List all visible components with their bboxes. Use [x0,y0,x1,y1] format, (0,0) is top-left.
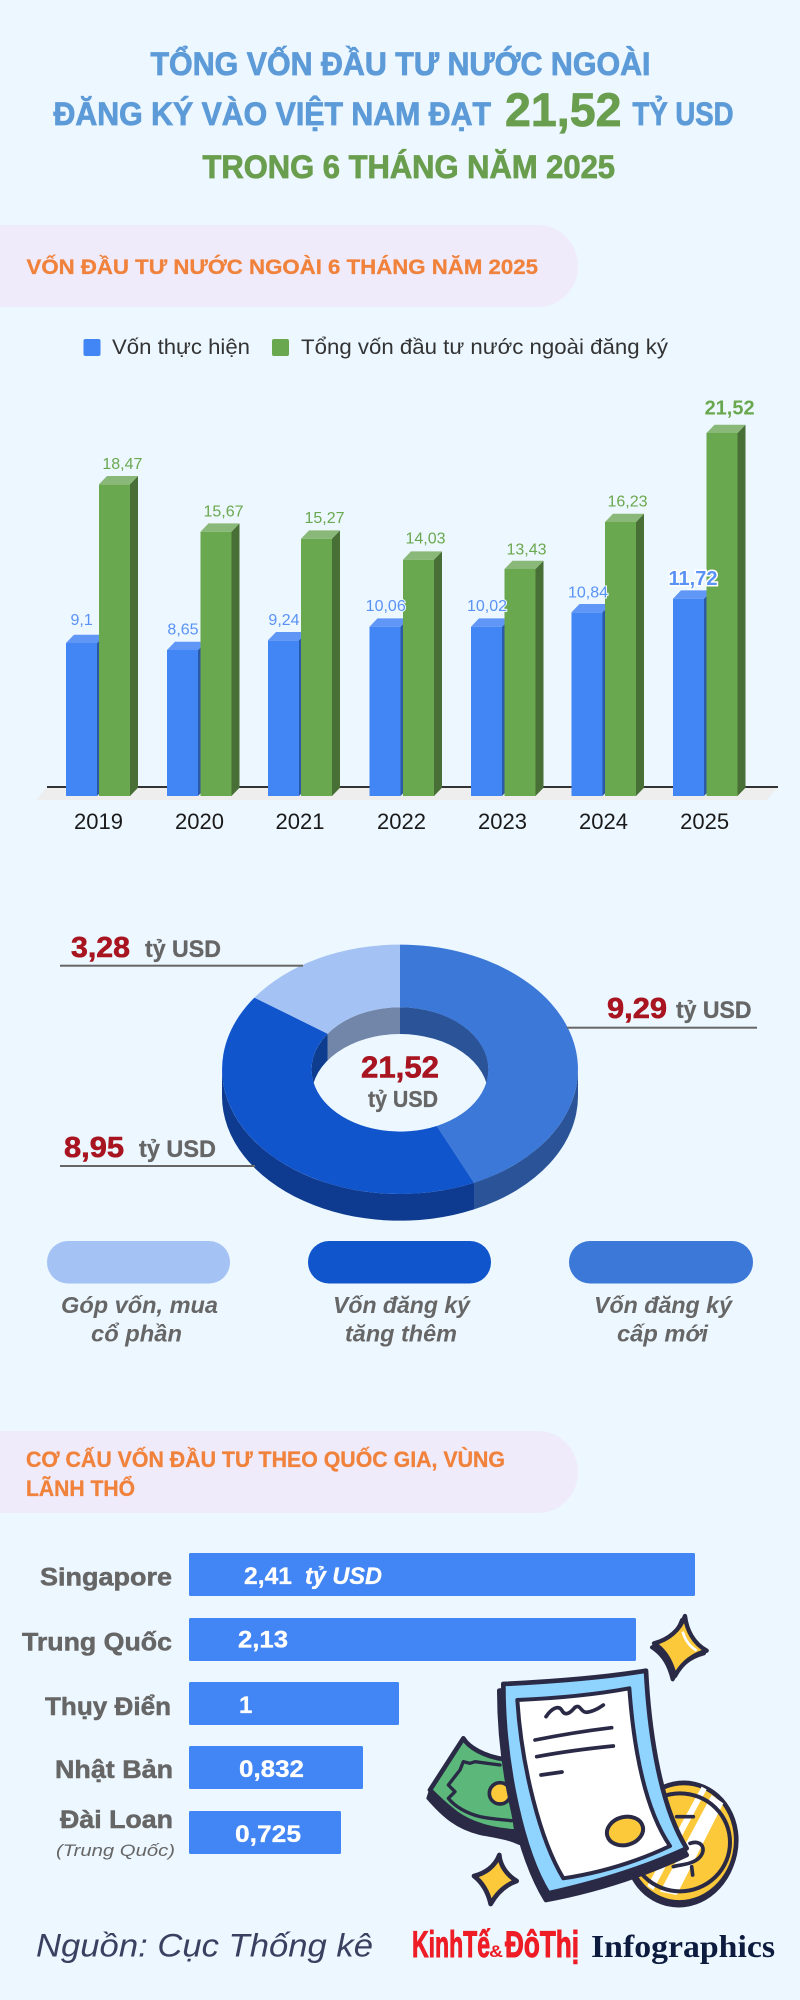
section heading: structure by country: CƠ CẤU VỐN ĐẦU TƯ THEO QUỐC GIA, VÙNG [26,1446,505,1472]
green value labels: 16,23 [607,494,648,511]
row: Singapore: 2,41 [244,1563,292,1590]
logo: Kinh Tế và Đô Thị Infographics [412,1924,775,1965]
logo: Kinh Tế và Đô Thị Infographics: KinhTế [412,1924,490,1965]
legend pill: capital contribution [47,1241,230,1347]
green value labels: 14,03 [405,531,446,548]
source: Nguồn: Cục Thống kê [36,1928,373,1964]
legend pill: additional registered capital [308,1241,491,1347]
icon: coin [632,1780,739,1908]
blue value labels: 11,72 [669,568,717,590]
legend pill: capital contribution: Góp vốn, mua [61,1292,218,1318]
bars 2021 [268,530,340,796]
legend pill: new registered capital: cấp mới [617,1321,709,1347]
icon: large sparkle [652,1616,707,1679]
row: Nhật Bản: 0,832 [239,1756,304,1783]
bars 2022 [370,551,442,796]
donut inner wall and hole [312,1007,488,1132]
title: TỶ USD [632,96,734,132]
row: Trung Quốc: 2,13 [238,1626,288,1654]
row: Đài Loan: 0,725 [235,1821,301,1848]
3D donut chart [222,945,578,1221]
callout: 8,95 [60,1132,255,1167]
row: Thụy Điển: Thụy Điển [45,1693,171,1721]
title [54,46,734,185]
icon: small sparkle [474,1855,517,1904]
chart legend: Vốn thực hiện [112,336,250,359]
legend pill: capital contribution: cổ phần [91,1321,182,1347]
section heading: structure by country: LÃNH THỔ [26,1476,135,1501]
blue value labels: 10,06 [366,598,406,615]
section heading: structure by country [0,1431,578,1513]
legend pill: new registered capital [569,1241,753,1347]
illustration: contract, banknote, coin and sparkles [427,1616,747,1915]
blue value labels [70,568,717,639]
year axis labels [74,809,729,834]
row: Singapore: tỷ USD [305,1563,382,1590]
row: Trung Quốc [22,1618,636,1661]
3D bar chart [36,397,778,834]
row: Đài Loan: Đài Loan [60,1806,173,1834]
blue value labels: 9,24 [268,612,300,629]
title: ĐĂNG KÝ VÀO VIỆT NAM ĐẠT [54,96,491,132]
icon: banknote [427,1738,521,1844]
title: TRONG 6 THÁNG NĂM 2025 [202,149,615,185]
icon: contract paper [499,1671,687,1900]
year axis labels: 2024 [579,809,628,834]
donut outer side wall [222,1069,578,1221]
blue value labels: 10,02 [467,598,507,615]
row: Singapore [40,1553,695,1596]
blue value labels: 9,1 [70,612,93,629]
row: Đài Loan: (Trung Quốc) [56,1841,175,1860]
row: Nhật Bản [55,1746,363,1789]
callout: 8,95: tỷ USD [139,1136,216,1163]
row: Nhật Bản: Nhật Bản [55,1756,173,1784]
green value labels [102,397,755,558]
center total [361,1050,439,1112]
bars 2020 [167,523,240,796]
year axis labels: 2023 [478,809,527,834]
center total: tỷ USD [368,1086,438,1112]
slice: additional registered capital [222,998,474,1194]
center total: 21,52 [361,1050,439,1085]
slice: capital contribution [254,945,400,1034]
year axis labels: 2025 [680,809,729,834]
year axis labels: 2019 [74,809,123,834]
callout: 8,95: 8,95 [64,1132,124,1164]
bars 2019 [66,476,138,796]
horizontal bar chart by country [22,1553,695,1860]
year axis labels: 2020 [175,809,224,834]
legend pill: new registered capital: Vốn đăng ký [594,1292,733,1318]
legend pill: additional registered capital: Vốn đăng ký [333,1292,471,1318]
green value labels: 13,43 [506,541,547,558]
section heading: foreign investment 6 months: VỐN ĐẦU TƯ NƯỚC NGOÀI 6 THÁNG NĂM 2025 [26,253,538,279]
chart legend [84,336,669,359]
callout: 3,28: tỷ USD [145,936,221,963]
legend pill: additional registered capital: tăng thêm [345,1321,457,1347]
green value labels: 15,67 [203,504,244,521]
green value labels: 21,52 [705,397,755,419]
chart legend: Tổng vốn đầu tư nước ngoài đăng ký [301,336,669,359]
year axis labels: 2021 [276,809,324,834]
row: Trung Quốc: Trung Quốc [22,1628,172,1656]
slice: new registered capital [400,945,578,1183]
bars 2025 [673,425,746,796]
row: Đài Loan [56,1806,341,1860]
callout: 3,28: 3,28 [71,932,130,964]
blue value labels: 8,65 [167,622,199,639]
title: 21,52 [505,83,622,136]
row: Thụy Điển [45,1682,399,1725]
bars 2023 [471,561,544,796]
title: TỔNG VỐN ĐẦU TƯ NƯỚC NGOÀI [150,46,650,82]
logo: Kinh Tế và Đô Thị Infographics: ĐôThị [505,1924,579,1965]
logo: Kinh Tế và Đô Thị Infographics: & [489,1942,503,1961]
green value labels: 18,47 [102,456,143,473]
callout: 9,29 [567,993,757,1029]
callout: 9,29: 9,29 [607,993,667,1025]
year axis labels: 2022 [377,809,426,834]
callout: 9,29: tỷ USD [676,997,752,1024]
bars 2024 [572,514,644,796]
section heading: foreign investment 6 months [0,225,578,307]
blue value labels: 10,84 [568,584,608,601]
row: Singapore: Singapore [40,1564,172,1592]
green value labels: 15,27 [304,510,345,527]
logo: Kinh Tế và Đô Thị Infographics: Infographics [591,1928,775,1964]
row: Thụy Điển: 1 [239,1692,252,1719]
callout: 3,28 [60,932,303,967]
